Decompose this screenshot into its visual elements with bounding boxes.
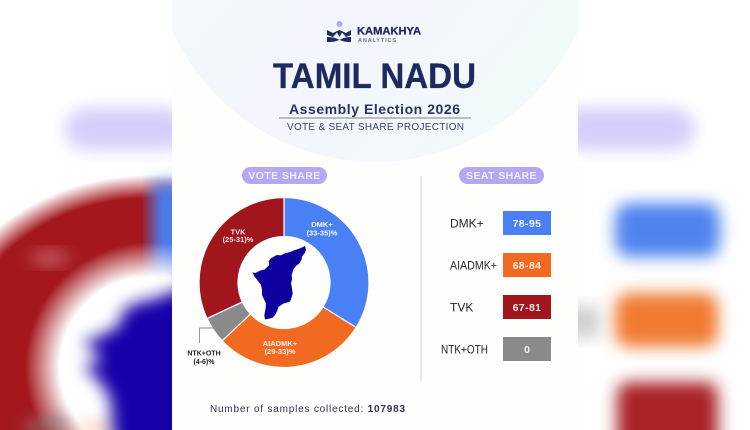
seat row: DMK+: DMK+: [450, 216, 484, 230]
logo: ANALYTICS: [358, 38, 396, 44]
tagline: VOTE & SEAT SHARE PROJECTION: [287, 122, 464, 133]
seat row: DMK+: 78-95: [513, 218, 541, 230]
leader line: NTK+OTH: [200, 328, 215, 343]
logo: [327, 21, 421, 44]
subtitle rule: [279, 118, 471, 119]
seat row: DMK+: [450, 211, 551, 235]
seat row: NTK+OTH: NTK+OTH: [441, 342, 488, 356]
donut chart: vote share: [199, 198, 369, 368]
label: TVK: TVK: [230, 228, 246, 236]
icon: Tamil Nadu map: [253, 246, 306, 319]
footer: sample count: Number of samples collected: 107983: [210, 404, 405, 415]
segment: DMK+: [284, 198, 369, 328]
seat row: AIADMK+: AIADMK+: [450, 258, 497, 272]
seat row: TVK: [450, 295, 551, 319]
label: TVK: (25-31)%: [223, 235, 254, 244]
heading: seat share: SEAT SHARE: [466, 170, 537, 182]
divider: [420, 176, 422, 381]
segment: AIADMK+: [222, 307, 356, 368]
seat row: TVK: TVK: [450, 300, 473, 314]
seat row: TVK: 67-81: [513, 302, 541, 314]
seat row: AIADMK+: 68-84: [513, 260, 541, 272]
label: AIADMK+: (29-33)%: [265, 347, 296, 356]
segment: NTK+OTH: [207, 302, 250, 341]
heading: vote share: VOTE SHARE: [248, 170, 321, 182]
seat row: NTK+OTH: [441, 337, 551, 361]
label: AIADMK+: AIADMK+: [263, 339, 298, 348]
heading: seat share: [459, 167, 544, 184]
label: NTK+OTH: NTK+OTH: [187, 350, 221, 358]
subtitle: Assembly Election 2026: [289, 101, 460, 117]
seat row: AIADMK+: [450, 253, 551, 277]
label: DMK+: (33-35)%: [307, 228, 338, 238]
label: DMK+: DMK+: [311, 220, 333, 229]
title: TAMIL NADU: [273, 57, 476, 96]
blurred background: left enlarged donut: [0, 108, 190, 430]
panel: central card: [161, 0, 589, 430]
logo: KAMAKHYA: [357, 26, 421, 38]
heading: vote share: [242, 167, 327, 184]
label: NTK+OTH: (4-6)%: [193, 359, 215, 366]
seat row: NTK+OTH: 0: [524, 344, 530, 356]
blurred background: right enlarged pills: [560, 108, 720, 430]
segment: TVK: [199, 198, 284, 318]
